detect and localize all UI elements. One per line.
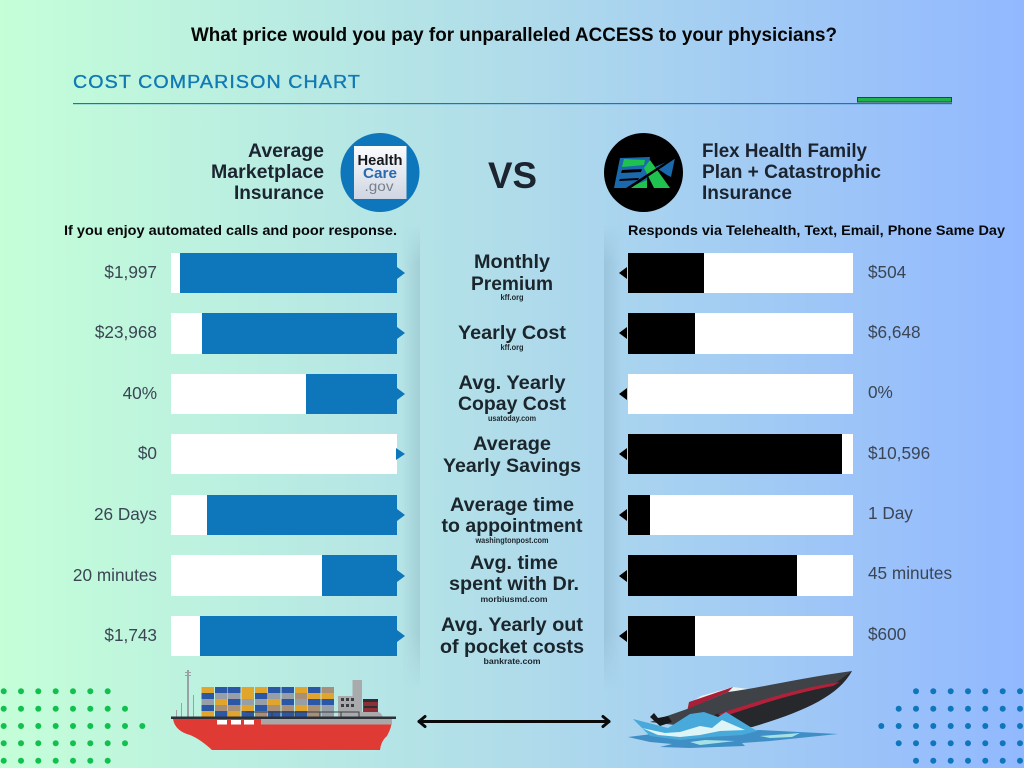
right bar	[619, 616, 853, 656]
right bar	[619, 434, 853, 474]
right bar	[619, 313, 853, 354]
heading rule with green accent	[73, 98, 952, 104]
left value: 20 minutes	[73, 565, 157, 585]
label: Avg. time	[470, 552, 558, 574]
subheading left: If you enjoy automated calls and poor response.	[64, 222, 397, 238]
right value: $504	[868, 262, 907, 282]
left value: $0	[138, 443, 157, 463]
left bar	[171, 313, 405, 354]
left bar	[171, 434, 405, 474]
heading: flex health family plan: Flex Health Family	[702, 141, 867, 162]
left value: 26 Days	[94, 504, 157, 524]
label: kff.org	[500, 293, 524, 302]
heading: flex health family plan: Insurance	[702, 183, 792, 204]
label: to appointment	[442, 515, 583, 537]
title: What price would you pay for unparalleled ACCESS to your physicians?	[191, 25, 837, 46]
label: Copay Cost	[458, 393, 566, 415]
heading: average marketplace insurance: Marketplace	[211, 162, 324, 183]
label: bankrate.com	[484, 657, 540, 666]
row: average yearly savings	[138, 433, 930, 477]
left value: $1,997	[104, 262, 157, 282]
label	[440, 614, 584, 666]
label: of pocket costs	[440, 636, 584, 658]
heading: flex health family plan	[702, 141, 881, 204]
row: avg time spent with dr	[73, 552, 952, 604]
dots left	[1, 688, 145, 764]
label	[443, 433, 581, 477]
row: avg yearly copay cost	[123, 372, 893, 423]
icon: speedboat	[628, 671, 852, 748]
label: Yearly Cost	[458, 322, 567, 344]
right value: $6,648	[868, 322, 921, 342]
label: usatoday.com	[488, 414, 536, 423]
left value: $23,968	[95, 322, 157, 342]
row: avg yearly out of pocket costs	[104, 614, 906, 666]
label: spent with Dr.	[449, 573, 579, 595]
subheading right: Responds via Telehealth, Text, Email, Phone Same Day	[628, 222, 1005, 238]
label: Yearly Savings	[443, 455, 581, 477]
left bar	[171, 616, 405, 656]
label: kff.org	[500, 343, 524, 352]
right value: 0%	[868, 382, 893, 402]
label	[458, 372, 566, 423]
right bar	[619, 555, 853, 596]
right value: 1 Day	[868, 503, 913, 523]
label	[442, 494, 583, 545]
right value: 45 minutes	[868, 563, 952, 583]
left value: $1,743	[104, 625, 157, 645]
label	[471, 251, 553, 302]
icon: healthcare.gov logo: .gov	[364, 178, 394, 194]
row: monthly premium	[104, 251, 907, 302]
label: Monthly	[474, 251, 550, 273]
label: washingtonpost.com	[475, 536, 548, 545]
label: Average	[473, 433, 551, 455]
heading: flex health family plan: Plan + Catastrophic	[702, 162, 881, 183]
left bar	[171, 555, 405, 596]
right bar	[619, 253, 853, 293]
label: Avg. Yearly out	[441, 614, 584, 636]
label	[449, 552, 579, 604]
arrow: double headed	[419, 716, 609, 726]
label: Average time	[450, 494, 574, 516]
icon: healthcare.gov logo	[340, 133, 420, 212]
icon: flex health logo	[604, 133, 683, 212]
vs label: VS	[488, 155, 537, 196]
dots right	[878, 688, 1023, 764]
heading: average marketplace insurance	[211, 141, 324, 204]
row: yearly cost	[95, 313, 921, 354]
label: Premium	[471, 273, 553, 295]
left value: 40%	[123, 383, 157, 403]
right value: $10,596	[868, 443, 930, 463]
row: average time to appointment	[94, 494, 913, 545]
left bar	[171, 253, 405, 293]
heading: cost comparison chart: COST COMPARISON CHART	[73, 72, 361, 92]
heading: average marketplace insurance: Insurance	[234, 183, 324, 204]
icon: healthcare.gov logo: Care	[363, 165, 397, 182]
right bar	[619, 374, 853, 414]
heading: average marketplace insurance: Average	[248, 141, 324, 162]
label: Avg. Yearly	[458, 372, 566, 394]
right value: $600	[868, 624, 906, 644]
center panel shadow	[410, 241, 614, 667]
icon: cargo ship	[171, 670, 396, 750]
icon: healthcare.gov logo: Health	[358, 152, 402, 169]
label: morbiusmd.com	[480, 595, 548, 604]
left bar	[171, 374, 405, 414]
left bar	[171, 495, 405, 535]
right bar	[619, 495, 853, 535]
